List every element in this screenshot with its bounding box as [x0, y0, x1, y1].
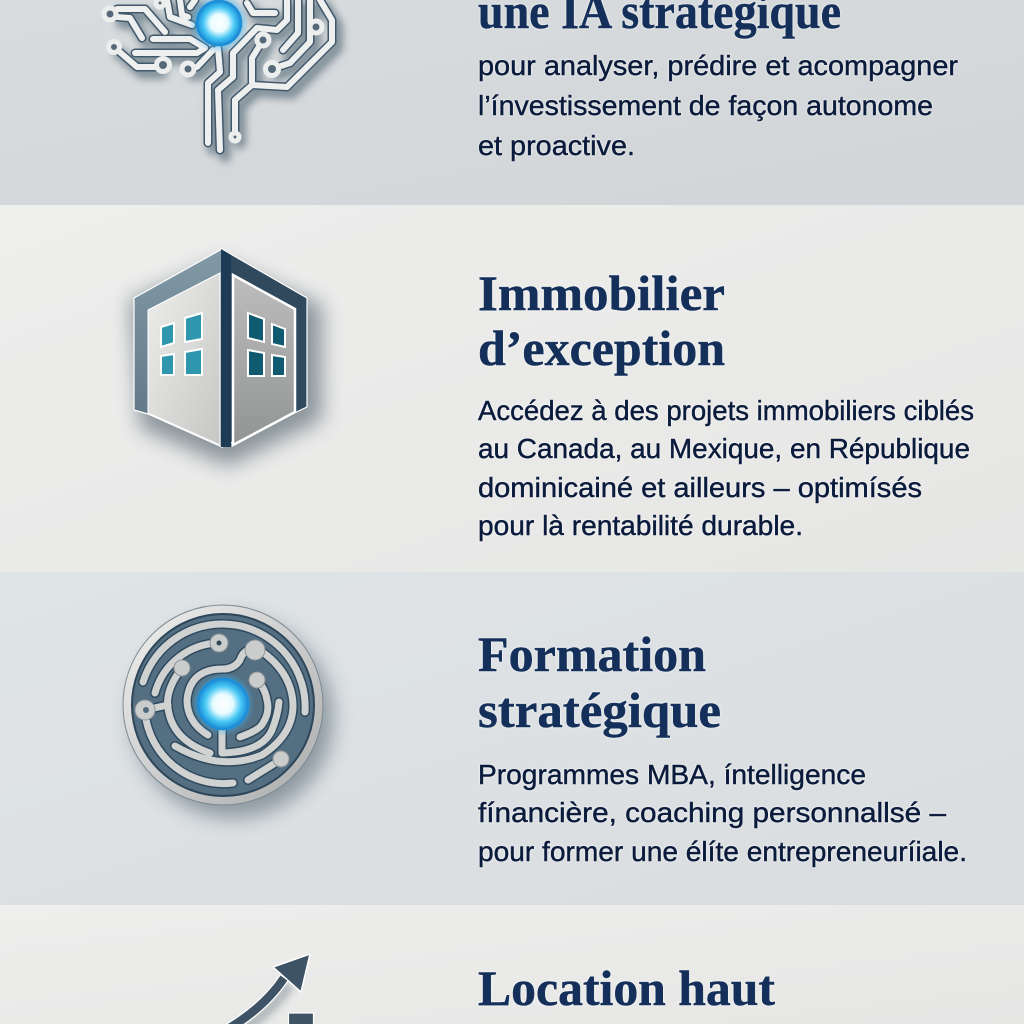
- panel background: [0, 905, 1024, 1024]
- left windows: [161, 313, 202, 375]
- icon: building: [130, 249, 322, 466]
- body text: l’ínvestissement de façon autonome: [478, 90, 933, 121]
- body text: et proactive.: [478, 130, 635, 161]
- heading: [478, 626, 721, 738]
- body text: [478, 395, 974, 541]
- glowing core: [189, 0, 249, 53]
- labyrinth nodes: [135, 634, 289, 767]
- body text: Programmes MBA, íntelligence: [478, 759, 866, 790]
- body text: [478, 759, 967, 867]
- panel background: [0, 572, 1024, 905]
- right windows: [248, 313, 285, 376]
- circuit nodes: [104, 0, 322, 141]
- panel background: [0, 0, 1024, 205]
- heading: Location haut: [478, 960, 775, 1016]
- panel: IA stratégique: [0, 0, 1024, 205]
- body text: fínancière, coaching personnallsé –: [478, 797, 946, 828]
- heading: Immobilier: [478, 265, 725, 321]
- body text: pour là rentabilité durable.: [478, 510, 803, 541]
- icon: circuit brain: [104, 0, 337, 156]
- heading: stratégique: [478, 682, 721, 738]
- heading: Formation: [478, 626, 706, 682]
- body text: pour former une élíte entrepreneuríiale.: [478, 836, 967, 867]
- body text: pour analyser, prédire et acompagner: [478, 50, 958, 81]
- heading: d’exception: [478, 320, 725, 376]
- panel: immobilier: [0, 205, 1024, 572]
- panel background: [0, 205, 1024, 572]
- panel: location: [0, 905, 1024, 1024]
- body text: dominicainé et ailleurs – optimísés: [478, 472, 922, 503]
- body text: au Canada, au Mexique, en République: [478, 433, 970, 464]
- bar: [288, 1013, 314, 1024]
- heading: [478, 265, 725, 376]
- body text: [478, 50, 958, 161]
- icon: rising arrow: [226, 954, 314, 1024]
- icon: labyrinth: [123, 605, 333, 818]
- glowing core: [191, 672, 255, 736]
- panel: formation: [0, 572, 1024, 905]
- body text: Accédez à des projets immobiliers ciblés: [478, 395, 974, 426]
